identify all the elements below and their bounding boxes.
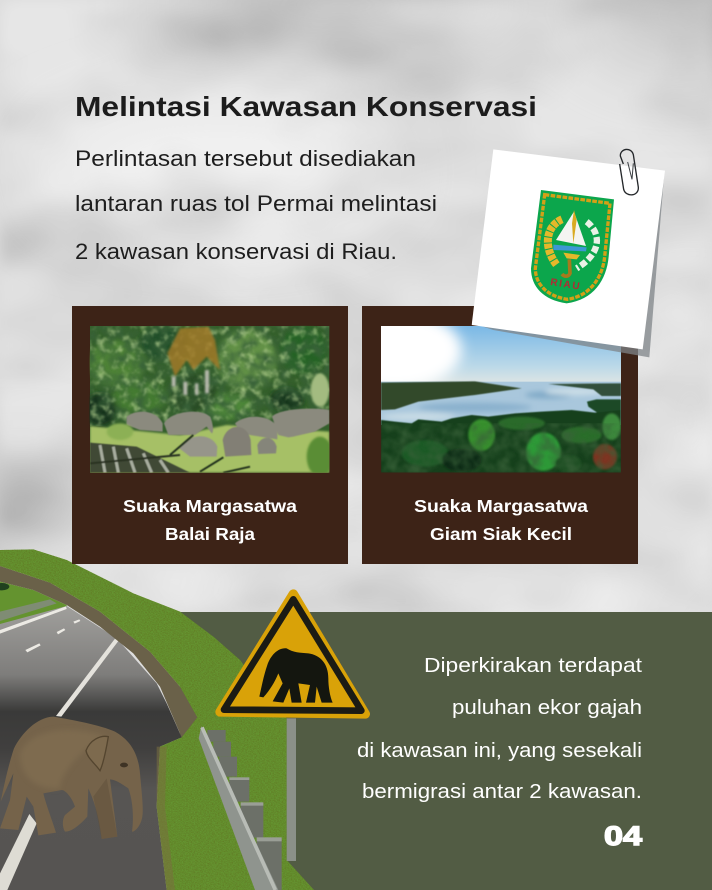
- label: Suaka Margasatwa: [414, 496, 588, 516]
- road: [0, 606, 182, 890]
- paper: [472, 149, 665, 349]
- wreath: [548, 219, 562, 265]
- sailboat: [556, 212, 586, 246]
- label: Balai Raja: [165, 524, 255, 544]
- label: Suaka Margasatwa: [123, 496, 297, 516]
- intro text: 2 kawasan konservasi di Riau.: [75, 239, 397, 264]
- overpass concrete arch: [0, 566, 197, 737]
- panel: Giam Siak Kecil card: [362, 306, 638, 564]
- background: cloudy sky: [0, 0, 712, 612]
- guardrail: [199, 726, 282, 890]
- intro text: lantaran ruas tol Permai melintasi: [75, 191, 437, 216]
- panel: green lower section: [180, 612, 712, 890]
- title: Melintasi Kawasan Konservasi: [75, 91, 537, 122]
- icon: Riau shield emblem: [531, 190, 614, 303]
- label: [414, 496, 588, 544]
- overpass and roadside grass: [0, 549, 314, 890]
- intro text: [75, 146, 437, 264]
- label: Giam Siak Kecil: [430, 524, 572, 544]
- distant grass verge: [0, 582, 67, 625]
- emblem name: RIAU: [550, 277, 582, 293]
- photo: elephants in forest: [83, 326, 333, 477]
- intro text: Perlintasan tersebut disediakan: [75, 146, 416, 171]
- photo: lake and forest: [381, 326, 621, 473]
- elephant calf crossing the road: [0, 717, 143, 839]
- illustration: wildlife overpass and road: [0, 549, 365, 890]
- paper shadow: [480, 177, 664, 357]
- page number: 04: [604, 821, 642, 851]
- panel: Balai Raja card: [72, 306, 348, 564]
- sign post: [287, 718, 296, 861]
- icon: paper clip: [620, 149, 638, 195]
- note: pinned paper with Riau emblem: [472, 149, 665, 357]
- text: migration note: puluhan ekor gajah: [452, 696, 642, 719]
- label: [123, 496, 297, 544]
- text: migration note: bermigrasi antar 2 kawasan.: [362, 780, 642, 803]
- text: migration note: Diperkirakan terdapat: [424, 654, 642, 677]
- text: migration note: di kawasan ini, yang sesekali: [357, 739, 642, 762]
- text: migration note: [357, 654, 642, 803]
- icon: elephant warning sign: [220, 594, 365, 714]
- cotton branch: [577, 222, 597, 268]
